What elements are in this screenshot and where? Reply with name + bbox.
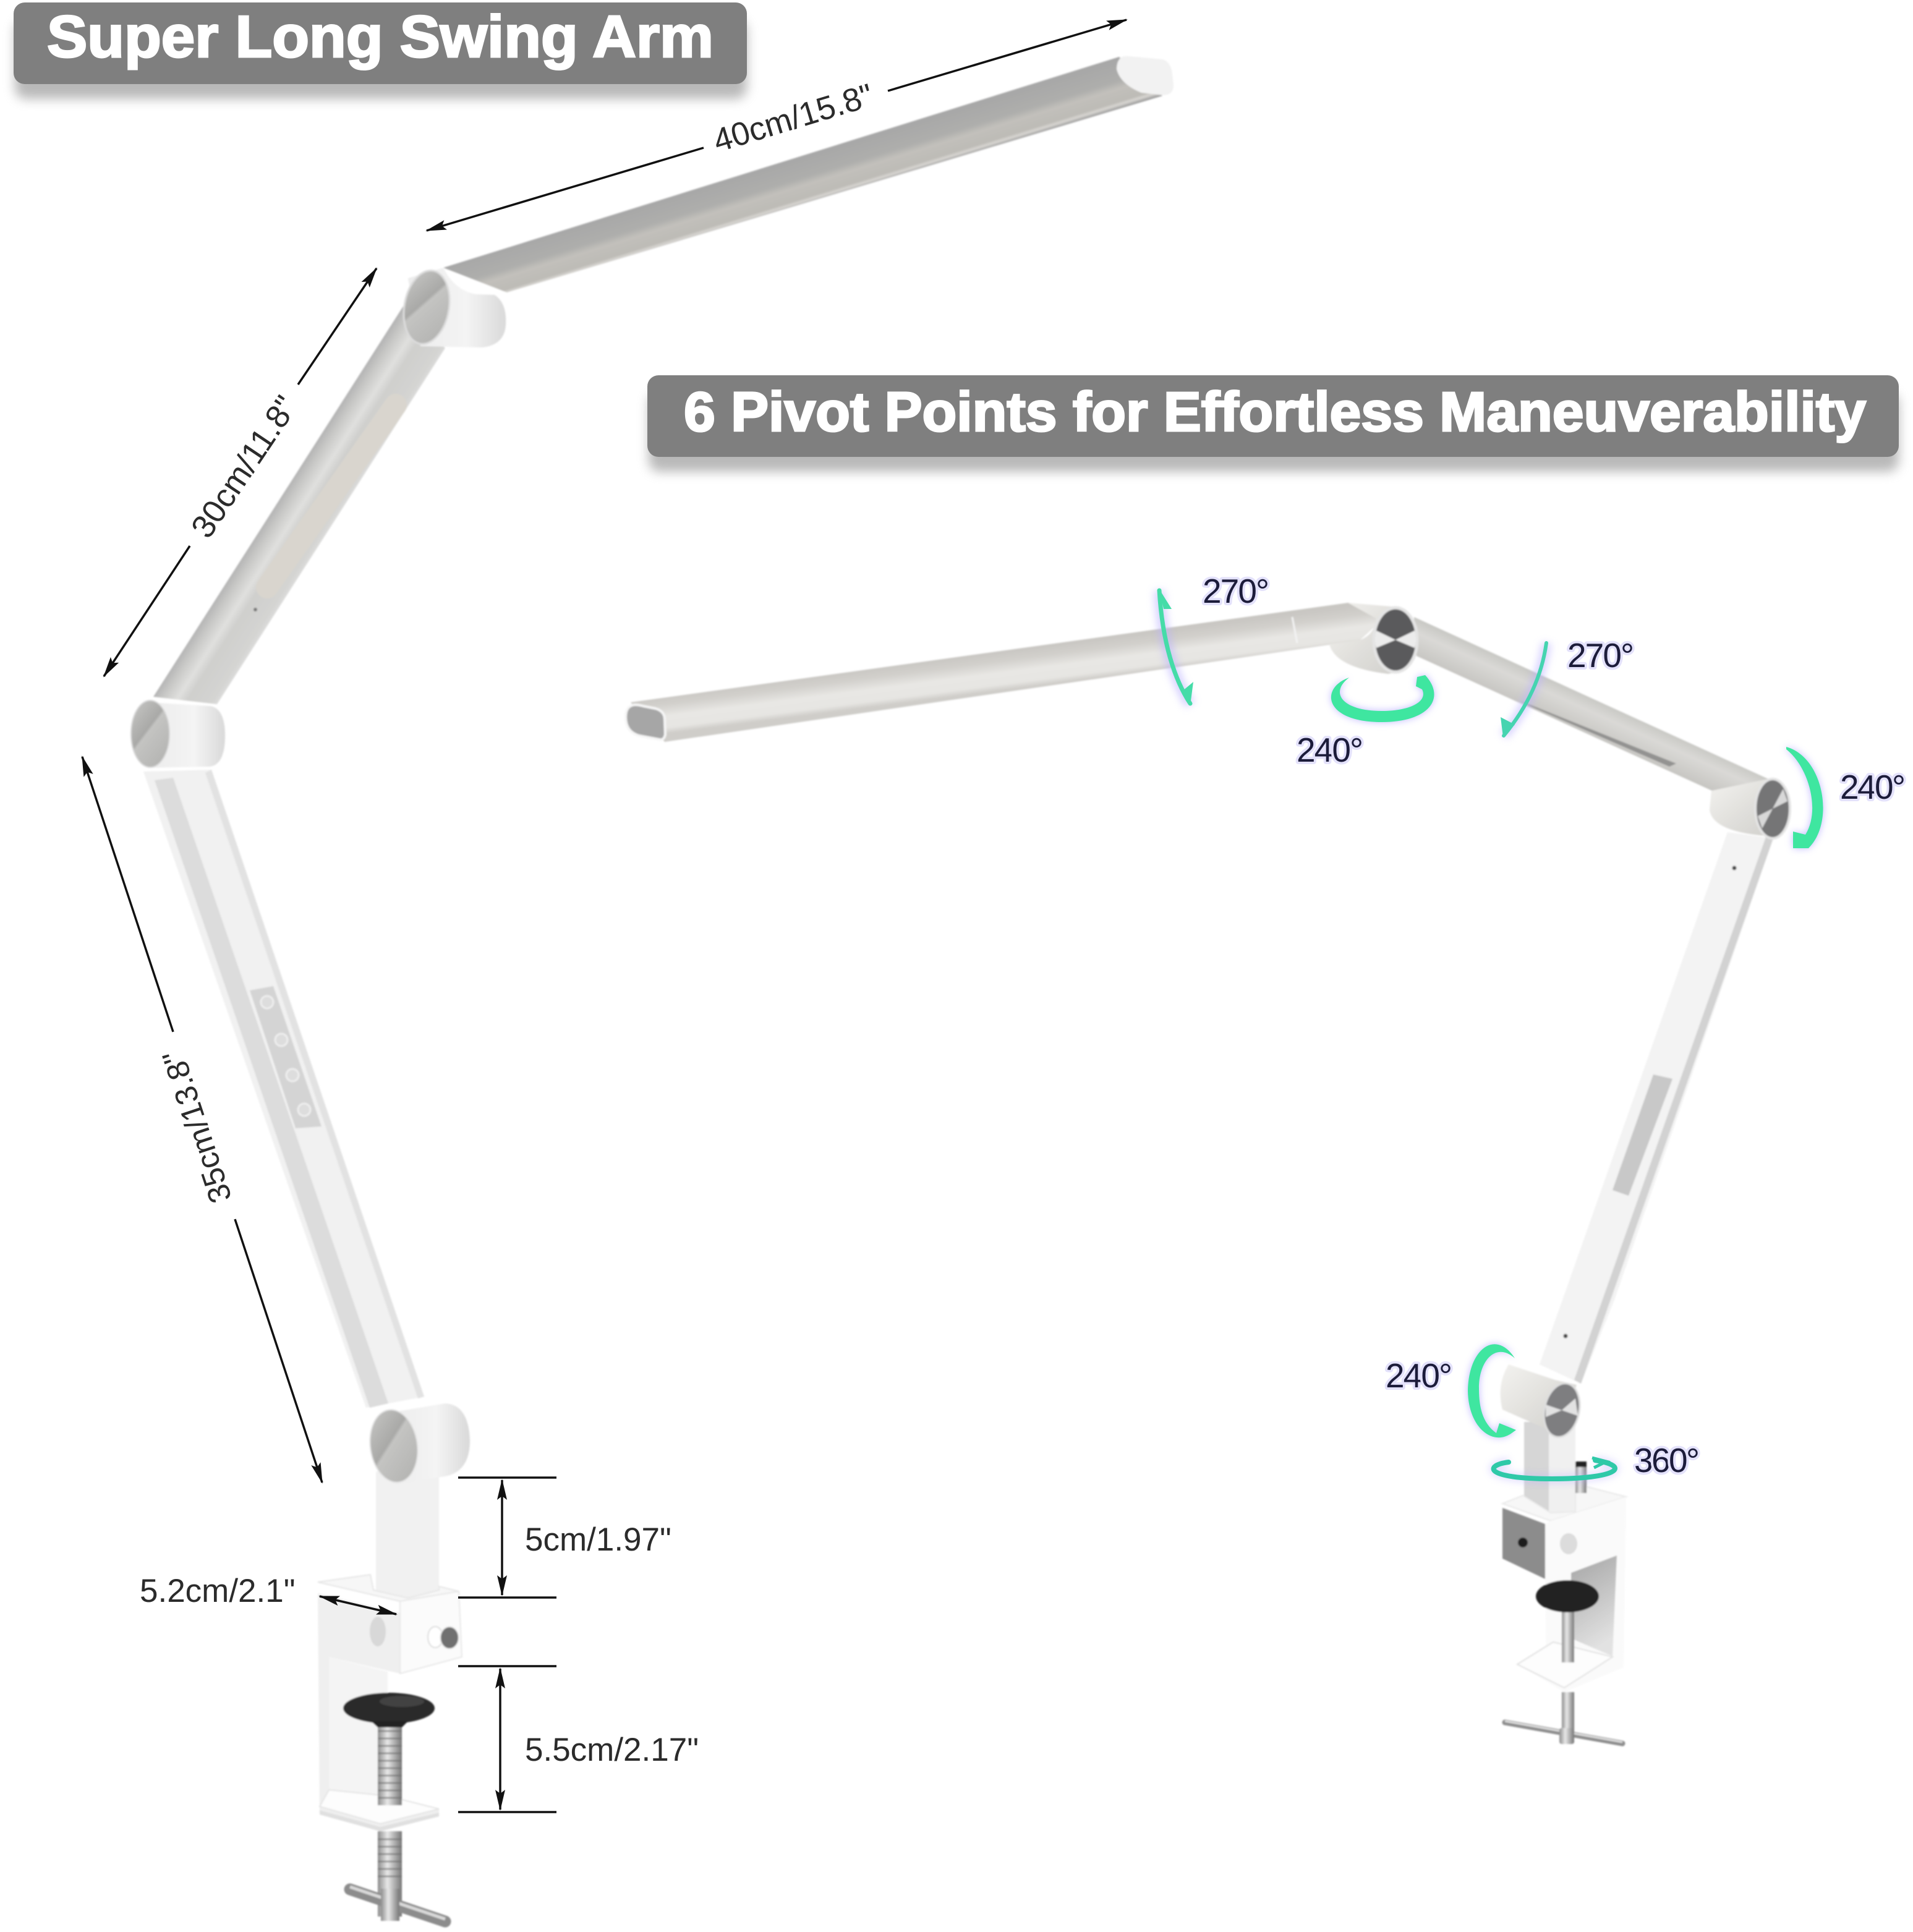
gray outer face [1502, 1508, 1545, 1579]
black clamp pad [343, 1693, 435, 1727]
side hole [370, 1617, 386, 1646]
rods [1562, 1611, 1574, 1743]
head arm [626, 603, 1394, 742]
angle label 270 second arm: 270° [1567, 636, 1634, 674]
lower arm with touch controls [143, 770, 424, 1408]
upper light arm [443, 56, 1174, 292]
banner heading text: 6 Pivot Points for Effortless Maneuverability [684, 381, 1866, 443]
joint B [1710, 779, 1790, 838]
banner heading text: Super Long Swing Arm [47, 4, 714, 70]
tightening knob [428, 1627, 459, 1649]
dimension: 5.2cm/2.1" [140, 1573, 396, 1614]
post [1524, 1422, 1575, 1520]
rotation arrow: second arm [1501, 643, 1546, 737]
rotation arrow: head arm [1159, 589, 1193, 705]
angle label 360 base: 360° [1634, 1441, 1700, 1479]
joint 3 [365, 1403, 470, 1486]
rotation arrow: joint B [1786, 747, 1823, 848]
label: 5cm/1.97" [525, 1521, 671, 1558]
third arm with control panel [1540, 832, 1773, 1384]
diffuser panel [267, 405, 396, 587]
arm tip cap [1117, 56, 1174, 95]
angle label 270 head arm: 270° [1203, 572, 1269, 610]
label: 30cm/11.8" [184, 389, 305, 545]
clamp body [1502, 1484, 1626, 1692]
control panel [1613, 1075, 1672, 1196]
left lamp: swing arm with clamp [131, 56, 1174, 1921]
dimension: 30cm/11.8" [104, 268, 377, 676]
middle arm with light panel [153, 305, 445, 704]
T handle [350, 1887, 445, 1921]
dimension: 40cm/15.8" [427, 20, 1127, 231]
joint C [1501, 1364, 1585, 1440]
angle label 240 under joint: 240° [1297, 731, 1363, 769]
rotation arrow: under joint [1331, 675, 1434, 722]
inner wall [1571, 1555, 1617, 1656]
post [376, 1471, 439, 1598]
banner: 6 Pivot Points [647, 375, 1899, 472]
clamp body [318, 1575, 462, 1831]
dimension: 35cm/13.8" [82, 757, 322, 1483]
T handle [1505, 1721, 1622, 1744]
rotation arrow: base 360 [1494, 1458, 1615, 1479]
threaded rods [378, 1723, 402, 1917]
angle label 240 joint B: 240° [1840, 768, 1906, 806]
angle label 240 joint C: 240° [1386, 1356, 1452, 1395]
black pad [1536, 1580, 1599, 1612]
label: 5.2cm/2.1" [140, 1573, 296, 1609]
label: 40cm/15.8" [709, 77, 877, 160]
label: 5.5cm/2.17" [525, 1732, 699, 1768]
banner: Super Long Swing Arm [14, 2, 747, 99]
second arm [1414, 617, 1768, 791]
right lamp: pivot view [626, 603, 1790, 1744]
joint A [1329, 603, 1417, 674]
rotation arrow: joint C [1468, 1344, 1516, 1437]
adjustment screw [1575, 1462, 1587, 1493]
touch control panel [250, 986, 322, 1128]
label: 35cm/13.8" [155, 1046, 239, 1207]
arm end face [626, 705, 665, 739]
joint 1 [398, 267, 506, 347]
joint 2 [131, 700, 225, 768]
